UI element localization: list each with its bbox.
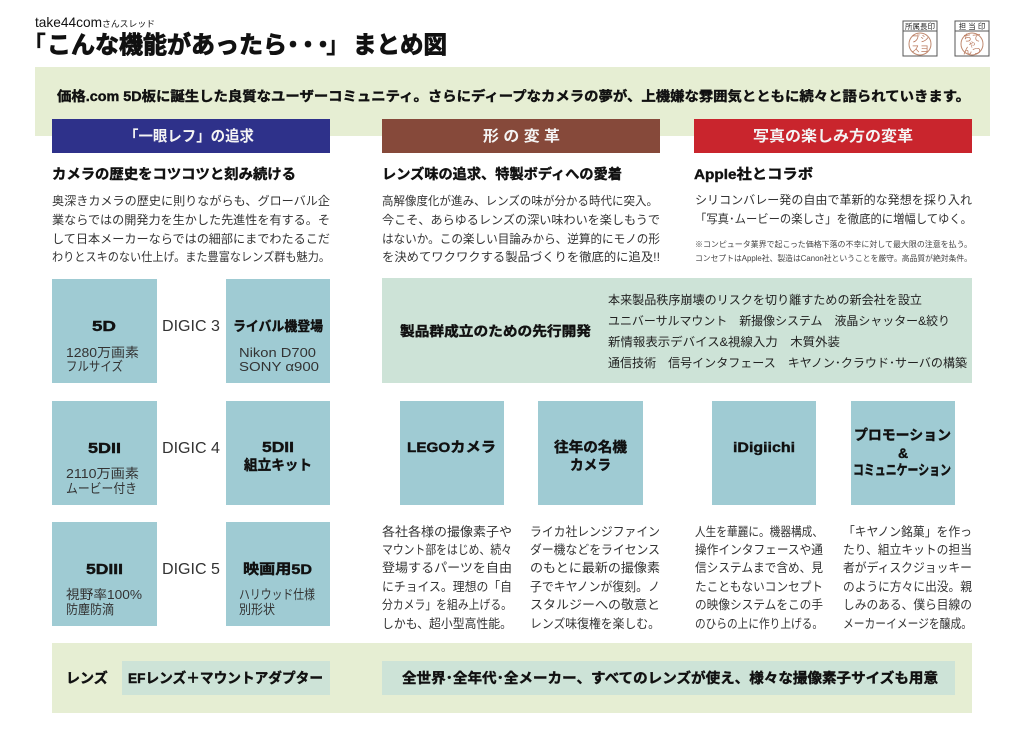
heading: column 2 (382, 119, 660, 153)
text block: lens flavour: はないか。この楽しい目論みから、逆算的にモノの形 (382, 231, 660, 246)
text block: iDigiichi description: の映像システムをこの手 (695, 598, 823, 612)
text block: camera history: カメラの歴史をコツコツと刻み続ける (52, 166, 296, 182)
text block: LEGO camera description: 各社各様の撮像素子や (382, 524, 512, 539)
card: 5DII assembly kit: 組立キット (244, 457, 312, 473)
text block: lens flavour: を決めてワクワクする製品づくりを徹底的に追及!! (382, 249, 660, 264)
title block: こんな機能があったら (47, 31, 287, 59)
card: 5D: 1280万画素 (66, 345, 139, 360)
card: movie 5D: ハリウッド仕様 (239, 587, 315, 602)
card: iDigiichi (712, 401, 816, 505)
card: 5DII: 2110万画素 (66, 466, 139, 481)
text block: Apple collaboration: シリコンバレー発の自由で革新的な発想を採り入れ (695, 192, 972, 207)
icon: approval stamps: 担 当 印 (959, 21, 985, 31)
card: movie 5D (226, 522, 330, 626)
text block: lens flavour: レンズ味の追求、特製ボディへの愛着 (382, 166, 622, 182)
card: rival models: SONY α900 (239, 359, 319, 374)
panel: lens footer: EFレンズ＋マウントアダプター (128, 670, 323, 686)
heading: column 3 (694, 119, 972, 153)
icon: approval stamps: ブシ (911, 33, 929, 44)
text block: promotion description: しみのある、僕ら目線の (843, 597, 972, 612)
icon: approval stamps: 所属長印 (905, 21, 935, 31)
card: movie 5D: 別形状 (239, 602, 275, 617)
panel: advance development: 製品群成立のための先行開発 (400, 323, 592, 339)
text block: Apple collaboration: ※コンピュータ業界で起こった価格下落の不幸に対して最大限の注意を払う。 (695, 239, 972, 249)
title block: まとめ図 (353, 32, 447, 59)
text block: promotion description: たり、組立キットの担当 (843, 543, 972, 557)
icon: approval stamps: んつ (963, 46, 981, 56)
card: 5D (52, 279, 157, 383)
card: 5DII assembly kit (226, 401, 330, 505)
text block: classic camera description (530, 524, 660, 631)
text block: lens flavour: 高解像度化が進み、レンズの味が分かる時代に突入。 (382, 193, 658, 208)
icon: approval stamps: ちて (963, 33, 981, 43)
text block: camera history: 奥深きカメラの歴史に則りながらも、グローバル企 (52, 193, 330, 208)
panel: advance development: 新情報表示デバイス&視線入力 木質外装 (608, 334, 840, 349)
card: 5DII (52, 401, 157, 505)
text block: classic camera description: のもとに最新の撮像素 (530, 560, 660, 575)
card: 5DIII: 視野率100% (66, 587, 142, 602)
icon: approval stamps (903, 21, 989, 56)
card: 5D: 5D (92, 318, 116, 335)
card: LEGO camera (400, 401, 504, 505)
text block: classic camera description: レンズ味復権を楽しむ。 (530, 616, 660, 631)
card: promotion and communication (851, 401, 955, 505)
text block: iDigiichi description: 人生を華麗に。機器構成、 (695, 525, 823, 539)
text block: iDigiichi description: たこともないコンセプト (695, 580, 823, 594)
card: promotion and communication: & (898, 445, 908, 461)
card: rival models: ライバル機登場 (233, 318, 323, 334)
text block: classic camera description: ライカ社レンジファイン (530, 524, 660, 539)
text block: Apple collaboration: 「写真･ムービーの楽しさ」を徹底的に増幅してゆく。 (695, 211, 972, 226)
text block: Apple collaboration: Apple社とコラボ (694, 166, 813, 182)
card: classic camera: カメラ (570, 457, 611, 473)
text block: camera history (52, 166, 330, 264)
card: 5DIII: 5DIII (86, 561, 123, 578)
text block: camera history: して日本メーカーならではの細部にまでわたるこだ (52, 231, 330, 246)
text block: LEGO camera description: にチョイス。理想の「自 (382, 579, 512, 594)
panel: lens footer (52, 643, 972, 713)
text block: Apple collaboration (694, 166, 972, 263)
heading: column 1: 「一眼レフ」の追求 (124, 127, 254, 145)
text block: iDigiichi description: 操作インタフェースや通 (695, 542, 823, 557)
title block (22, 14, 447, 59)
text block: lens flavour: 今こそ、あらゆるレンズの深い味わいを楽しもうで (382, 212, 660, 227)
card: classic camera (538, 401, 643, 505)
text block: LEGO camera description (382, 524, 512, 631)
text block: classic camera description: ダー機などをライセンス (530, 542, 660, 557)
card: 5DIII (52, 522, 157, 626)
icon: approval stamps: や (968, 41, 976, 49)
text block: iDigiichi description: 信システムまで含め、見 (695, 560, 823, 575)
text block: iDigiichi description: のひらの上に作り上げる。 (695, 617, 823, 631)
text block: lens flavour (382, 166, 660, 264)
text block: LEGO camera description: 登場するパーツを自由 (382, 560, 512, 575)
label: DIGIC 3: DIGIC 3 (162, 318, 220, 335)
card: 5DIII: 防塵防滴 (66, 602, 114, 617)
card: 5DII assembly kit: 5DII (262, 439, 294, 456)
text block: promotion description: のように方々に出没。親 (843, 579, 972, 594)
title block: 「 (22, 32, 46, 59)
text block: classic camera description: スタルジーへの敬意と (530, 598, 660, 612)
label: DIGIC 4: DIGIC 4 (162, 440, 220, 457)
text block: promotion description: 「キヤノン銘菓」を作っ (843, 524, 972, 539)
card: rival models: Nikon D700 (239, 345, 316, 360)
panel: intro banner (35, 67, 990, 136)
heading: column 1 (52, 119, 330, 153)
text block: iDigiichi description (695, 525, 823, 631)
card: 5DII: 5DII (88, 440, 121, 457)
text block: promotion description: 者がディスクジョッキー (843, 560, 972, 575)
text block: LEGO camera description: 分カメラ」を組み上げる。 (382, 598, 512, 612)
card: rival models (226, 279, 330, 383)
title block: 」 (326, 32, 350, 59)
panel: advance development (382, 278, 972, 383)
card: movie 5D: 映画用5D (243, 561, 312, 577)
label: DIGIC 5: DIGIC 5 (162, 561, 220, 578)
card: promotion and communication: プロモーション (854, 427, 951, 443)
text block: camera history: 業ならではの開発力を生かした先進性を有する。そ (52, 213, 330, 227)
card: 5D: フルサイズ (66, 359, 123, 374)
panel: advance development: 本来製品秩序崩壊のリスクを切り離すための新会社を設立 (608, 292, 922, 307)
text block: camera history: わりとスキのない仕上げ。また豊富なレンズ群も魅力。 (52, 249, 330, 264)
panel: lens footer: 全世界･全年代･全メーカー、すべてのレンズが使え、様々な撮像素子サイズも用意 (402, 670, 938, 686)
card: LEGO camera: LEGOカメラ (407, 439, 496, 455)
icon: approval stamps: スヨ (911, 44, 929, 54)
title block: take44com (35, 14, 102, 30)
text block: promotion description: メーカーイメージを醸成。 (843, 617, 972, 631)
panel: intro banner: 価格.com 5D板に誕生した良質なユーザーコミュニティ。さらにディープなカメラの夢が、上機嫌な雰囲気とともに続々と語られていきます。 (57, 88, 970, 104)
card: iDigiichi: iDigiichi (733, 439, 795, 455)
text block: LEGO camera description: しかも、超小型高性能。 (382, 616, 512, 631)
text block: Apple collaboration: コンセプトはApple社、製造はCanon社ということを厳守。高品質が絶対条件。 (695, 253, 972, 263)
card: 5DII: ムービー付き (66, 481, 137, 496)
heading: column 2: 形 の 変 革 (483, 127, 560, 145)
panel: advance development: ユニバーサルマウント 新撮像システム 液晶シャッター&絞り (608, 313, 950, 328)
panel: lens footer: レンズ (66, 670, 108, 686)
title block: ・・・ (281, 32, 335, 59)
card: promotion and communication: コミュニケーション (853, 462, 951, 478)
title block: さんスレッド (102, 19, 155, 29)
panel: advance development: 通信技術 信号インタフェース キヤノン･クラウド･サーバの構築 (608, 355, 967, 370)
text block: promotion description (843, 524, 972, 631)
card: classic camera: 往年の名機 (554, 439, 627, 455)
text block: LEGO camera description: マウント部をはじめ、続々 (382, 543, 512, 557)
text block: classic camera description: 子でキヤノンが復刻。ノ (530, 579, 660, 594)
heading: column 3: 写真の楽しみ方の変革 (753, 127, 913, 145)
